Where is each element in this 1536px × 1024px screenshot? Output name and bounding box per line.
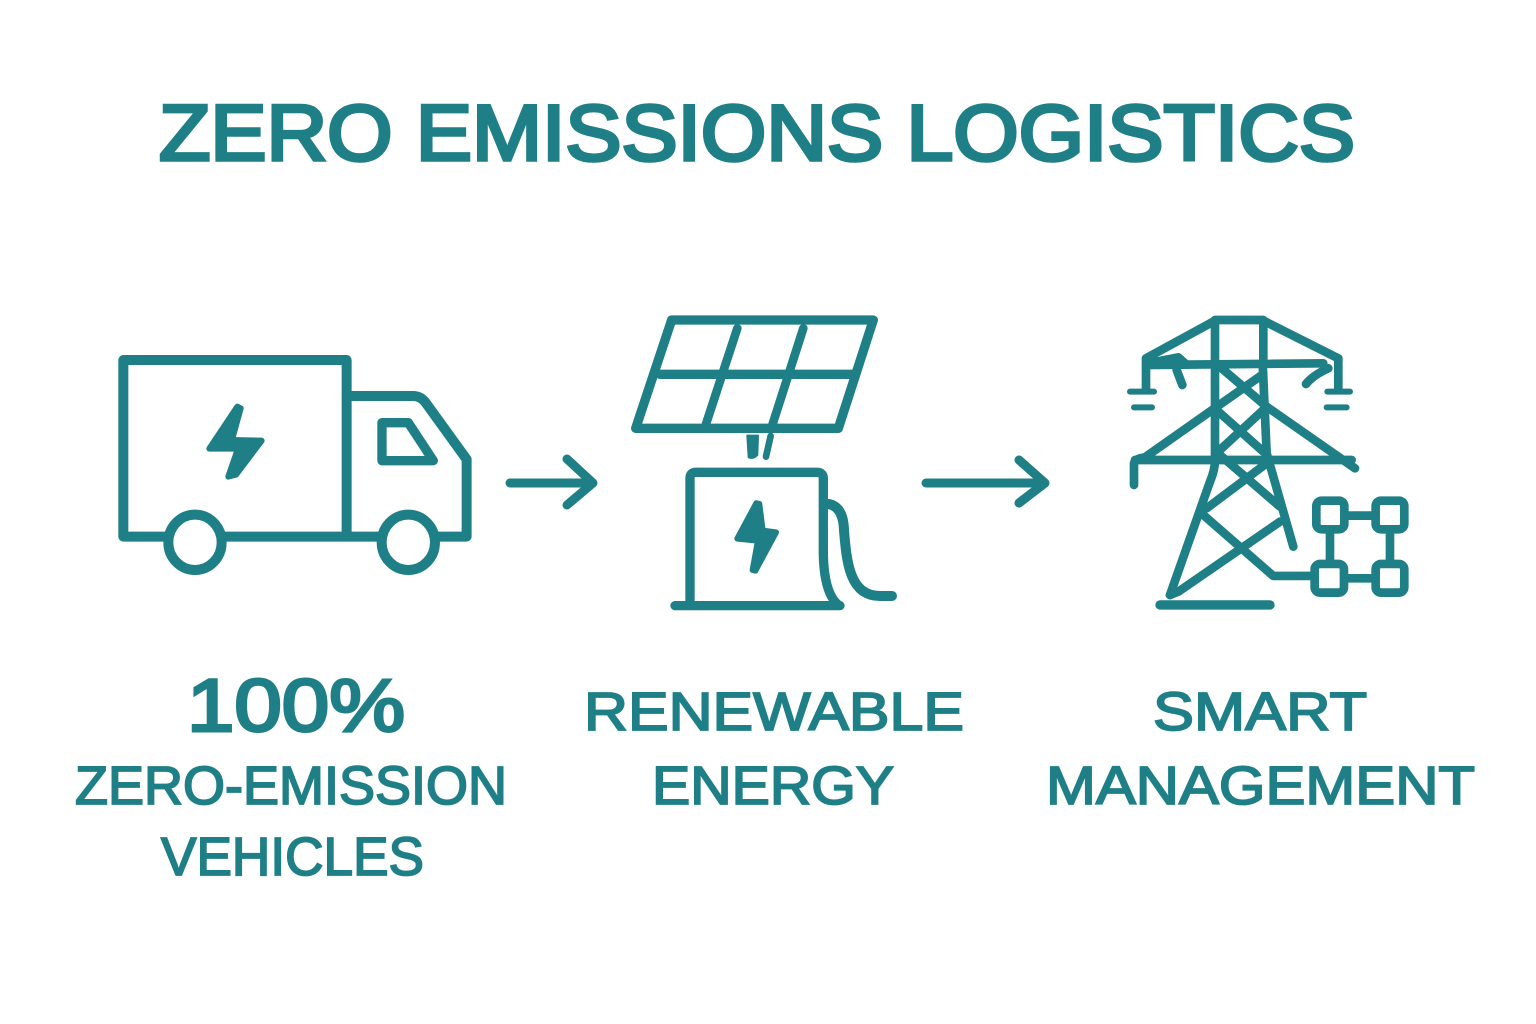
label: 100% zero-emission vehicles: VEHICLES [161, 827, 424, 887]
label: smart management [1046, 682, 1475, 816]
label: smart management: SMART [1153, 682, 1367, 742]
arrow: energy to management [926, 460, 1045, 503]
label: 100% zero-emission vehicles: 100% [187, 664, 405, 747]
icon: electric truck [123, 360, 467, 570]
label: 100% zero-emission vehicles [75, 664, 507, 887]
label: renewable energy: RENEWABLE [584, 682, 964, 742]
icon: solar panel and charging station [636, 320, 892, 606]
icon: transmission tower with network nodes [1130, 320, 1404, 605]
label: renewable energy [584, 682, 964, 816]
arrow: truck to energy [510, 459, 593, 505]
label: renewable energy: ENERGY [652, 756, 894, 816]
label: 100% zero-emission vehicles: ZERO-EMISSION [75, 756, 507, 816]
label: smart management: MANAGEMENT [1046, 756, 1475, 816]
title: ZERO EMISSIONS LOGISTICS [159, 88, 1355, 177]
